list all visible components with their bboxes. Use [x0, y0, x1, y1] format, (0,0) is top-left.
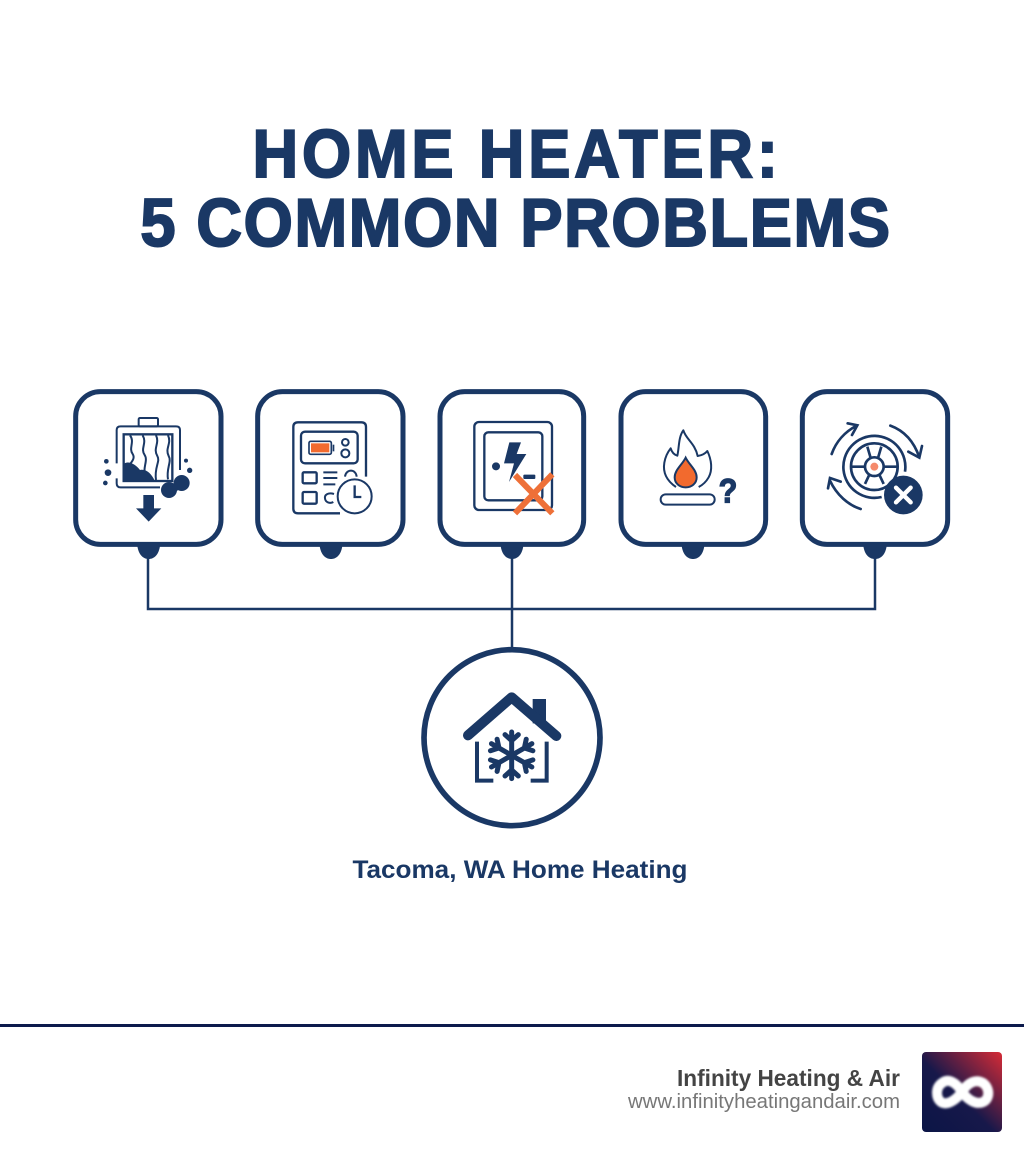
dirt build-up: [124, 463, 155, 481]
down arrow: [136, 495, 161, 522]
circle outline: [424, 650, 600, 826]
central home icon: [424, 650, 600, 826]
orange cross: [515, 474, 552, 513]
logo: [922, 1052, 1002, 1132]
company website: www.infinityheatingandair.com: [627, 1091, 900, 1113]
panel: tripped breaker icon: [440, 392, 584, 559]
house walls: [477, 742, 547, 781]
terminal dash: [523, 475, 535, 479]
burner base: [661, 494, 715, 505]
panel: blower fan icon: [802, 392, 948, 559]
fan wheel: [843, 436, 905, 498]
pilot drop: [675, 458, 697, 487]
panel: thermostat icon: [258, 392, 403, 559]
roof: [468, 697, 556, 736]
card frame with connector node: [440, 392, 584, 559]
connector lines: [148, 555, 875, 650]
card frame with connector node: [621, 392, 766, 559]
fault badge: [884, 476, 923, 514]
flame outline: [664, 430, 711, 487]
terminal dot: [492, 462, 500, 470]
location label: Tacoma, WA Home Heating: [352, 856, 688, 884]
snowflake: [488, 732, 535, 779]
fan hub: [870, 463, 878, 471]
company name: Infinity Heating & Air: [677, 1065, 900, 1091]
title: HOME HEATER:: [252, 116, 778, 191]
question mark: ?: [719, 472, 737, 510]
thermostat body: [293, 422, 366, 513]
rotation arrows: [828, 423, 922, 509]
filter housing: [117, 418, 180, 487]
breaker panel: [474, 422, 552, 510]
panel: pilot flame icon: [621, 392, 766, 559]
card frame with connector node: [258, 392, 403, 559]
dust particles: [103, 459, 192, 498]
card frame with connector node: [76, 392, 221, 559]
clock badge: [338, 479, 372, 513]
card frame with connector node: [802, 392, 948, 559]
battery low indicator: [309, 441, 334, 454]
title: [140, 116, 890, 260]
title: 5 COMMON PROBLEMS: [140, 185, 890, 260]
footer rule: [0, 1024, 1024, 1027]
panel: clogged filter icon: [76, 392, 221, 559]
pleats: [130, 435, 170, 480]
chimney: [533, 699, 546, 723]
lightning bolt: [504, 442, 526, 482]
